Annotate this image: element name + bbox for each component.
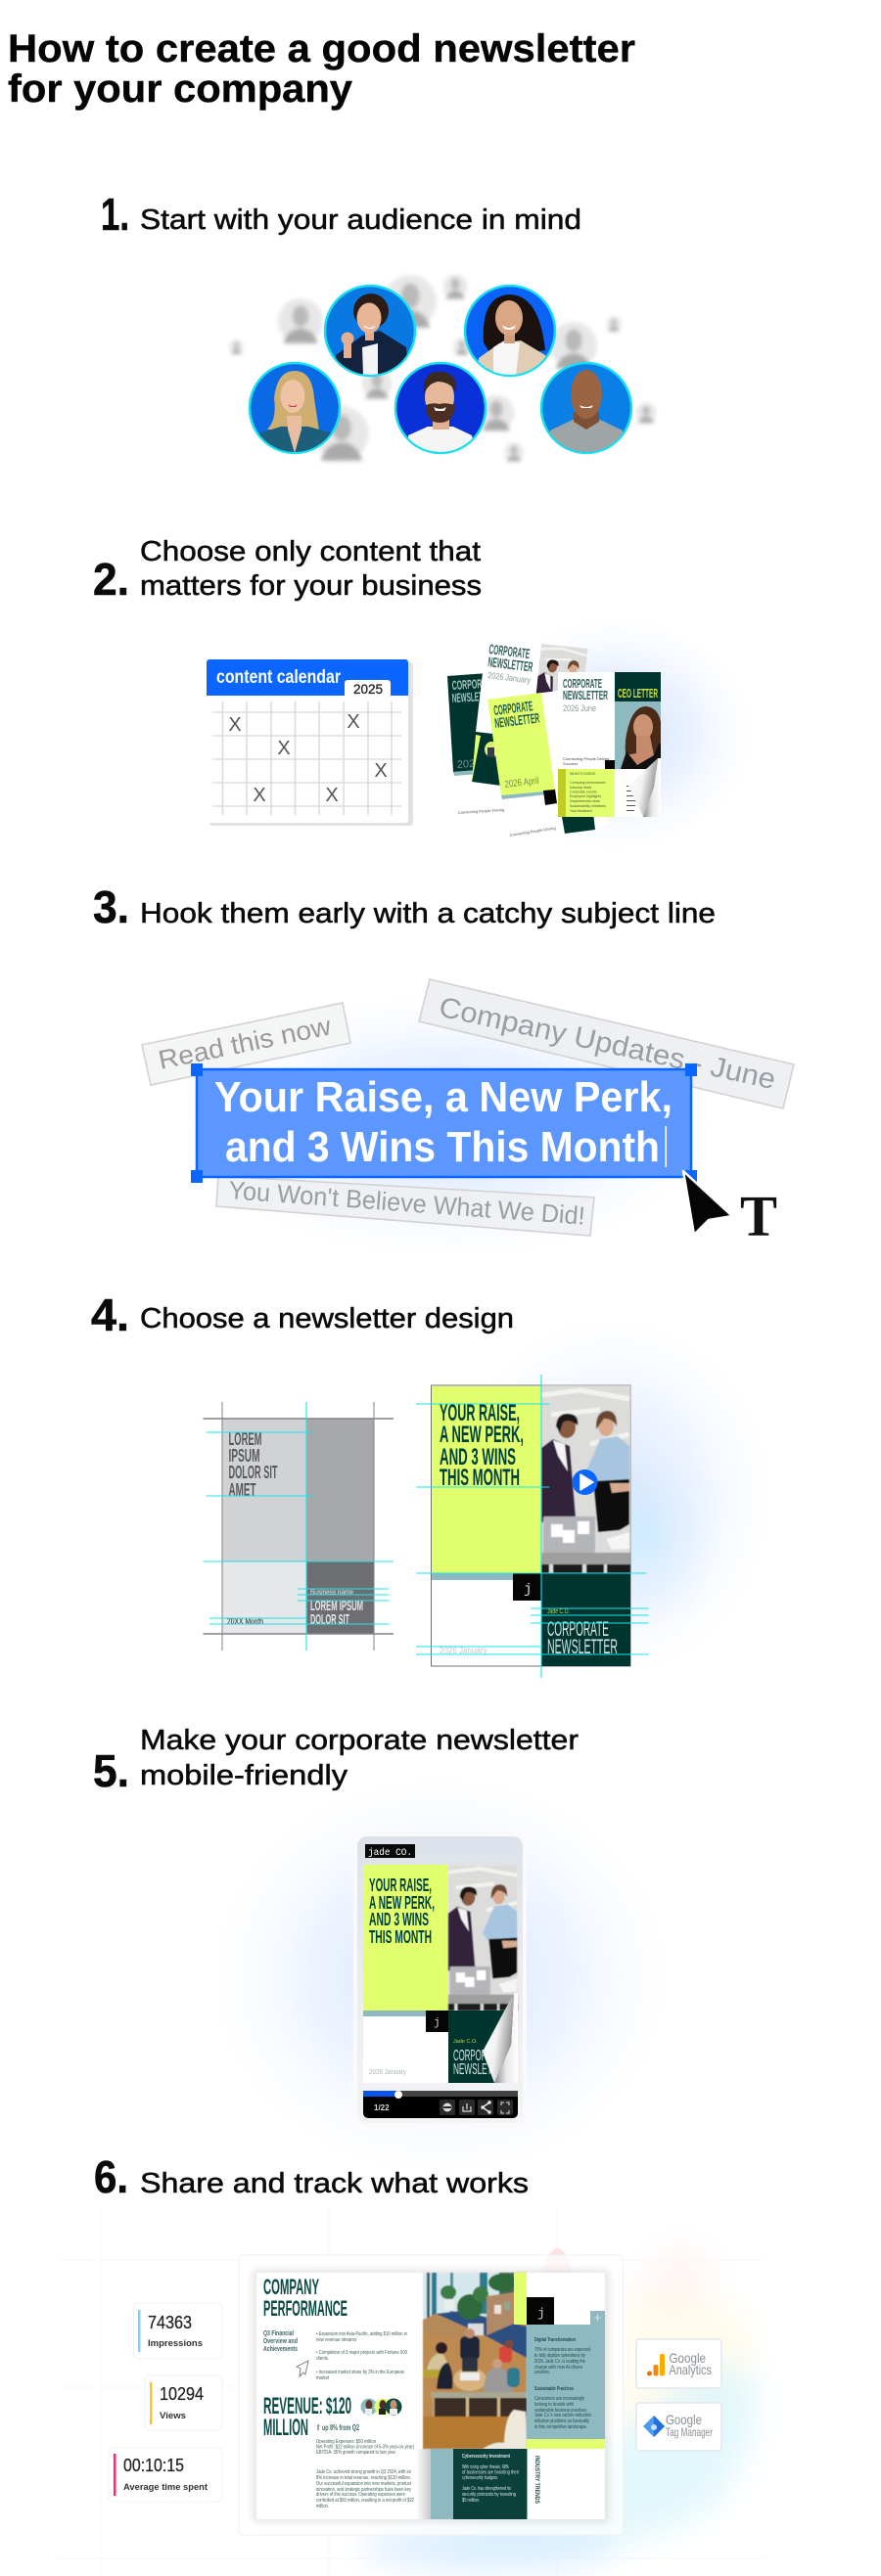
April page	[487, 691, 609, 842]
step 1 heading: 1.	[101, 189, 129, 240]
achievements: • Increased market share by 3% in the European	[316, 2370, 404, 2375]
phone newsletter cover: THIS MONTH	[369, 1927, 432, 1947]
achievements: • Expansion into Asia-Pacific, adding $10 million in	[316, 2331, 407, 2337]
step 5 heading	[93, 1725, 579, 1796]
stat card: impressions: 74363	[148, 2313, 192, 2332]
left page: MILLION	[263, 2415, 308, 2441]
April page: 2026 April	[504, 776, 539, 791]
step 6 heading	[94, 2151, 529, 2202]
selected subject line	[191, 1063, 697, 1183]
phone newsletter cover	[363, 1865, 518, 2083]
calendar marks: X	[277, 738, 291, 759]
tag manager diamond	[643, 2416, 665, 2437]
top right column: +	[594, 2310, 601, 2325]
final cover design	[416, 1375, 649, 1678]
front June page: Your feedback	[570, 809, 592, 813]
front June page: Departmental news	[570, 799, 600, 803]
step 3 heading	[93, 881, 716, 932]
teal column: Consumers are increasingly	[534, 2396, 584, 2402]
phone newsletter cover: CORPORATE	[453, 2048, 501, 2064]
wireframe layout: 20XX Month	[227, 1617, 263, 1626]
body paragraph: drivers of this success. Operating expenses were	[316, 2492, 405, 2498]
top right column	[514, 2273, 605, 2325]
teal column: 2026. Jade Co. is leading the	[534, 2359, 585, 2365]
wireframe layout: LOREM	[229, 1429, 262, 1449]
teal column: Jade Co.'s new carbon-reduction	[534, 2413, 591, 2418]
phone newsletter cover: AND 3 WINS	[369, 1910, 429, 1929]
front June page: Sustainability initiatives	[570, 804, 606, 808]
achievements: • Completion of 3 major projects with Fortune 500	[316, 2350, 407, 2356]
calendar marks: X	[228, 714, 242, 736]
back dark page: CORPORATE	[451, 675, 495, 693]
selected subject line: Your Raise, a New Perk,	[214, 1073, 672, 1121]
front June page: CORPORATE	[563, 676, 602, 691]
step 2 glow	[480, 616, 754, 851]
player controls: 1/22	[374, 2103, 390, 2112]
analytics bars	[647, 2354, 665, 2375]
left page: ⇧ up 8% from Q2	[316, 2423, 359, 2432]
badge: google analytics: Analytics	[670, 2362, 712, 2377]
calendar marks: X	[325, 785, 339, 806]
wireframe layout	[204, 1402, 394, 1650]
bottom right column: INDUSTRY TRENDS	[533, 2456, 539, 2504]
headline	[440, 1400, 524, 1491]
option: company updates: Company Updates - June	[436, 992, 778, 1096]
wireframe layout: Business name	[310, 1588, 353, 1597]
badge: google analytics	[636, 2339, 721, 2388]
calendar marks: X	[347, 711, 360, 733]
step 6 heading: Share and track what works	[140, 2168, 529, 2199]
brand badge	[365, 1844, 415, 1859]
phone newsletter cover: A NEW PERK,	[369, 1893, 435, 1913]
left page	[256, 2273, 431, 2519]
stat card: impressions	[133, 2303, 222, 2359]
mobile preview	[353, 1832, 527, 2127]
achievements: new revenue streams	[316, 2337, 356, 2343]
stat card: average time	[109, 2448, 222, 2502]
bottom dark column: Cybersecurity Investment	[462, 2454, 510, 2460]
teal column: initiative positions us favorably	[534, 2418, 589, 2424]
badge: google tag manager: Google	[666, 2412, 702, 2427]
stat card: views	[145, 2375, 222, 2430]
player controls	[363, 2091, 518, 2118]
front June page: Employee highlights	[570, 794, 601, 798]
headline: A NEW PERK,	[440, 1422, 524, 1448]
content calendar	[207, 659, 413, 826]
wireframe layout: IPSUM	[229, 1446, 260, 1466]
front June page: WHAT'S INSIDE	[570, 772, 596, 776]
teal column: sustainable business practices.	[534, 2408, 587, 2414]
phone newsletter cover: j	[434, 2017, 440, 2029]
icon: text cursor: T	[740, 1184, 777, 1248]
step 4 heading: Choose a newsletter design	[140, 1303, 514, 1334]
front June page: 2026 June	[563, 703, 596, 713]
step 5 heading: 5.	[93, 1745, 129, 1796]
calendar marks	[228, 711, 388, 806]
section label: Achievements	[263, 2344, 298, 2353]
step 3 glow	[186, 993, 715, 1257]
bottom right column	[527, 2449, 605, 2519]
person 1	[325, 286, 415, 376]
front June page: Company performance	[570, 781, 606, 785]
final cover design: Jade C.O.	[547, 1608, 570, 1615]
body paragraph: Jade Co. achieved strong growth in Q3 2024, with an	[316, 2469, 411, 2475]
back dark page: NEWSLETTER	[451, 688, 495, 705]
bottom dark column	[431, 2449, 527, 2519]
April page: NEWSLETTER	[493, 709, 540, 731]
bottom dark column: Jade Co. has strengthened its	[462, 2486, 511, 2492]
section label: Overview and	[263, 2336, 298, 2345]
step 4 heading	[91, 1289, 514, 1340]
front June page: Connecting People Driving	[563, 756, 609, 761]
step 2 heading: matters for your business	[140, 570, 482, 602]
bottom dark column: cybersecurity budgets.	[462, 2475, 498, 2481]
year tab	[345, 680, 391, 697]
body paragraph: million.	[316, 2504, 329, 2509]
left page: Net Profit: $22 million (increase of 5-3% year-on-year)	[316, 2444, 414, 2450]
teal column: solutions.	[534, 2370, 550, 2375]
teal column: Sustainable Practices	[534, 2386, 574, 2392]
left page: REVENUE: $120	[263, 2393, 351, 2419]
calendar marks: X	[374, 760, 388, 782]
front June page: Corporate events	[570, 791, 597, 794]
step 5 heading: Make your corporate newsletter	[140, 1725, 579, 1756]
front June page: NEWSLETTER	[563, 688, 608, 702]
phone newsletter cover: YOUR RAISE,	[369, 1876, 432, 1895]
stat card: average time: Average time spent	[123, 2482, 208, 2492]
January page: 2026 January	[487, 670, 532, 685]
icon: play button	[572, 1469, 597, 1495]
subject line options	[142, 979, 794, 1236]
option: you won't believe: You Won't Believe What We Did!	[228, 1175, 586, 1231]
title: for your company	[8, 68, 353, 111]
back dark page: Connecting People Driving	[458, 807, 504, 815]
title: How to create a good newsletter	[8, 27, 635, 70]
front June page: Success	[563, 761, 578, 766]
January page: NEWSLETTER	[487, 654, 533, 675]
left page: Operating Expenses: $50 million	[316, 2439, 376, 2445]
report panel	[239, 2255, 623, 2535]
phone newsletter cover: NEWSLETTER	[453, 2061, 508, 2078]
option: company updates	[419, 979, 794, 1108]
option: read this now	[142, 1003, 350, 1085]
bottom dark column: of businesses are boosting their	[462, 2469, 519, 2475]
audience illustration	[229, 275, 657, 462]
final cover design: j	[524, 1582, 532, 1598]
body paragraph: Our successful expansion into new markets, product	[316, 2481, 411, 2487]
person 3	[250, 363, 340, 453]
left page: PERFORMANCE	[263, 2296, 348, 2321]
headline: AND 3 WINS	[440, 1444, 516, 1470]
badge: google tag manager	[636, 2403, 721, 2451]
person 2	[465, 286, 555, 376]
phone newsletter cover: Jade C.O.	[453, 2039, 478, 2045]
stat card: impressions: Impressions	[148, 2338, 203, 2348]
step 1 heading: Start with your audience in mind	[140, 204, 581, 236]
April page: CORPORATE	[492, 698, 533, 718]
achievements: clients.	[316, 2356, 329, 2362]
final cover design: NEWSLETTER	[547, 1636, 618, 1658]
step 5 glow	[210, 1776, 671, 2177]
teal column: Digital Transformation	[534, 2337, 576, 2343]
option: read this now: Read this now	[156, 1011, 334, 1075]
phone newsletter cover: 2026 January	[369, 2069, 406, 2076]
left page: COMPANY	[263, 2275, 319, 2299]
achievements	[316, 2331, 407, 2381]
April page: Connecting People Driving	[509, 826, 556, 837]
brand badge: jade CO.	[368, 1847, 412, 1859]
wireframe layout: DOLOR SIT	[310, 1611, 349, 1628]
section label	[263, 2328, 298, 2353]
section label: Q3 Financial	[263, 2328, 294, 2337]
stat card: views: Views	[160, 2411, 186, 2420]
icon: text cursor	[683, 1171, 777, 1248]
front June page	[558, 672, 661, 817]
front June page: CEO LETTER	[618, 686, 658, 700]
bottom dark column: With rising cyber threats, 68%	[462, 2464, 509, 2470]
body paragraph: 8% increase in total revenue, reaching $120 million.	[316, 2475, 411, 2481]
step 4 glow	[450, 1316, 773, 1678]
front June page: Industry news	[570, 786, 591, 790]
final cover design: CORPORATE	[547, 1618, 609, 1641]
office photo	[423, 2273, 527, 2449]
back dark page	[447, 672, 504, 820]
newsletter stack	[447, 639, 661, 842]
top right column: j	[537, 2306, 545, 2321]
bottom dark column: $5 million.	[462, 2498, 480, 2504]
headline: THIS MONTH	[440, 1465, 520, 1491]
step 2 heading: Choose only content that	[140, 536, 481, 567]
selected subject line: and 3 Wins This Month	[225, 1123, 660, 1171]
person 4	[395, 363, 486, 453]
January page: CORPORATE	[488, 641, 531, 661]
step 5 heading: mobile-friendly	[140, 1760, 348, 1791]
achievements: market	[316, 2375, 329, 2381]
January page	[472, 639, 588, 786]
step 3 heading: Hook them early with a catchy subject line	[140, 898, 716, 929]
step 3 heading: 3.	[93, 881, 129, 932]
headline: YOUR RAISE,	[440, 1400, 520, 1426]
wireframe layout: DOLOR SIT	[229, 1463, 278, 1482]
step 2 heading: 2.	[93, 554, 129, 605]
badge: google tag manager: Tag Manager	[666, 2425, 713, 2439]
wireframe layout: LOREM IPSUM	[310, 1598, 363, 1614]
calendar title: content calendar	[216, 667, 341, 688]
teal column: charge with new AI-driven	[534, 2365, 582, 2371]
back dark page: 2026	[456, 758, 482, 771]
stat card: average time: 00:10:15	[123, 2456, 184, 2475]
title	[8, 27, 635, 111]
body paragraph: controlled at $50 million, resulting in a net profit of $22	[316, 2498, 414, 2504]
left page: EBITDA: 35% growth compared to last year	[316, 2450, 395, 2456]
step 2 heading	[93, 536, 482, 605]
bottom dark column: security protocols by investing	[462, 2492, 516, 2498]
teal column: 75% of companies are expected	[534, 2347, 590, 2353]
teal column	[527, 2325, 605, 2449]
step 6 heading: 6.	[94, 2151, 128, 2202]
wireframe layout: AMET	[229, 1480, 256, 1500]
body paragraph	[316, 2469, 414, 2509]
teal column: in this competitive landscape.	[534, 2424, 587, 2430]
icon: rocket	[297, 2361, 308, 2376]
body paragraph: innovation, and strategic partnerships have been key	[316, 2487, 411, 2493]
year tab: 2025	[353, 681, 383, 697]
person 5	[541, 363, 631, 453]
blurred background people	[229, 275, 657, 462]
calendar marks: X	[253, 785, 266, 806]
final cover design: 2026 January	[440, 1646, 487, 1655]
teal column: to fully digitize operations by	[534, 2353, 585, 2359]
badge: google analytics: Google	[670, 2350, 706, 2366]
step 4 heading: 4.	[91, 1289, 129, 1340]
teal column: looking to brands with	[534, 2402, 574, 2408]
step 1 heading	[101, 189, 581, 240]
stat card: views: 10294	[160, 2384, 204, 2404]
avatars	[360, 2399, 401, 2415]
step 6 backdrop	[59, 2206, 764, 2576]
